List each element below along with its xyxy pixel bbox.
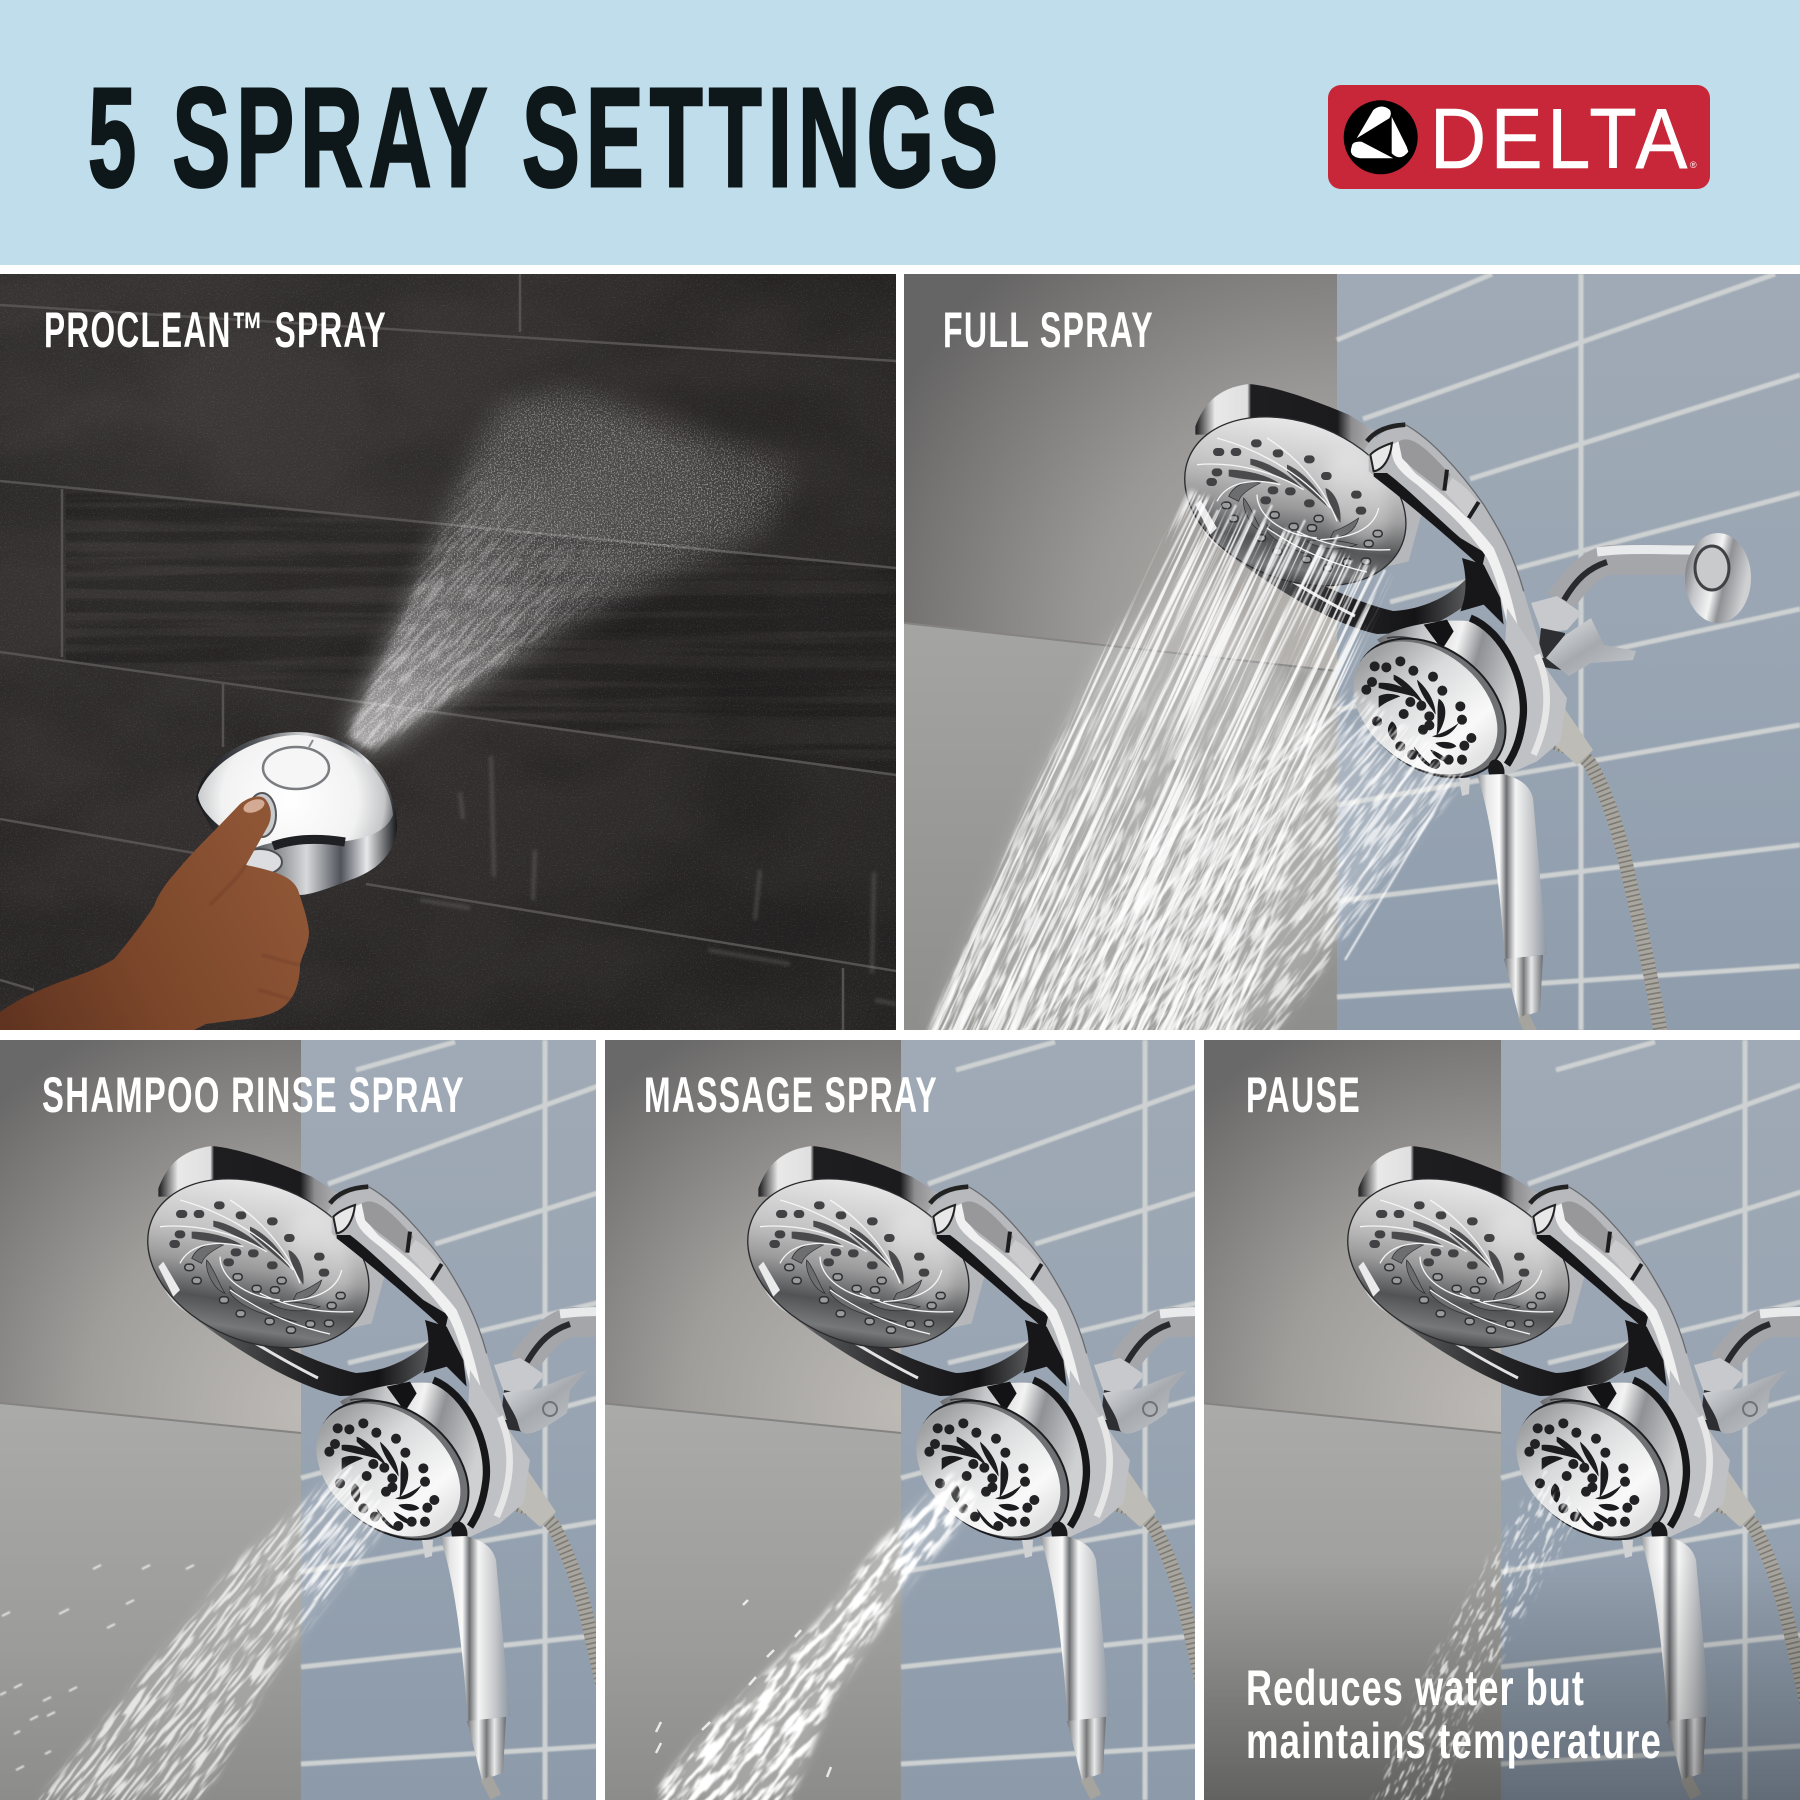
water: pause trickle xyxy=(1479,1640,1480,1641)
label: pause: PAUSE xyxy=(1246,1067,1361,1123)
label: shampoo rinse: SHAMPOO RINSE SPRAY xyxy=(42,1067,465,1123)
logo: Delta: DELTA xyxy=(1430,92,1692,187)
spray mist xyxy=(334,374,805,764)
wing nut xyxy=(1546,618,1636,676)
water: full spray xyxy=(931,495,1455,1030)
logo: Delta: ® xyxy=(1690,160,1697,170)
pause description: Reduces water but xyxy=(1246,1660,1585,1716)
panel: massage spray xyxy=(600,1040,1314,1800)
header band xyxy=(0,0,1800,265)
panel: full spray xyxy=(904,274,1800,1036)
label: full spray: FULL SPRAY xyxy=(943,302,1154,358)
title: 5 SPRAY SETTINGS xyxy=(88,58,1004,216)
shower head xyxy=(1322,1146,1800,1798)
spray jet streaks xyxy=(460,639,461,641)
panel: pause xyxy=(1200,1040,1800,1800)
round shower head xyxy=(196,732,397,895)
wing nut xyxy=(1103,1370,1187,1434)
pause description: maintains temperature xyxy=(1246,1713,1662,1769)
wing nut xyxy=(1703,1370,1787,1434)
panel: shampoo rinse spray xyxy=(0,1040,596,1800)
shower head xyxy=(1159,384,1751,1036)
logo: Delta xyxy=(1328,85,1710,189)
hand pressing button xyxy=(0,797,309,1030)
wing nut xyxy=(503,1370,587,1434)
water: shampoo rinse spray xyxy=(0,1465,388,1798)
label: ProClean: PROCLEAN™ SPRAY xyxy=(44,302,387,358)
label: massage: MASSAGE SPRAY xyxy=(644,1067,938,1123)
water: massage spray xyxy=(656,1473,981,1798)
panel: ProClean spray xyxy=(0,274,896,1030)
shower head xyxy=(722,1146,1314,1798)
shower head xyxy=(147,1146,596,1800)
